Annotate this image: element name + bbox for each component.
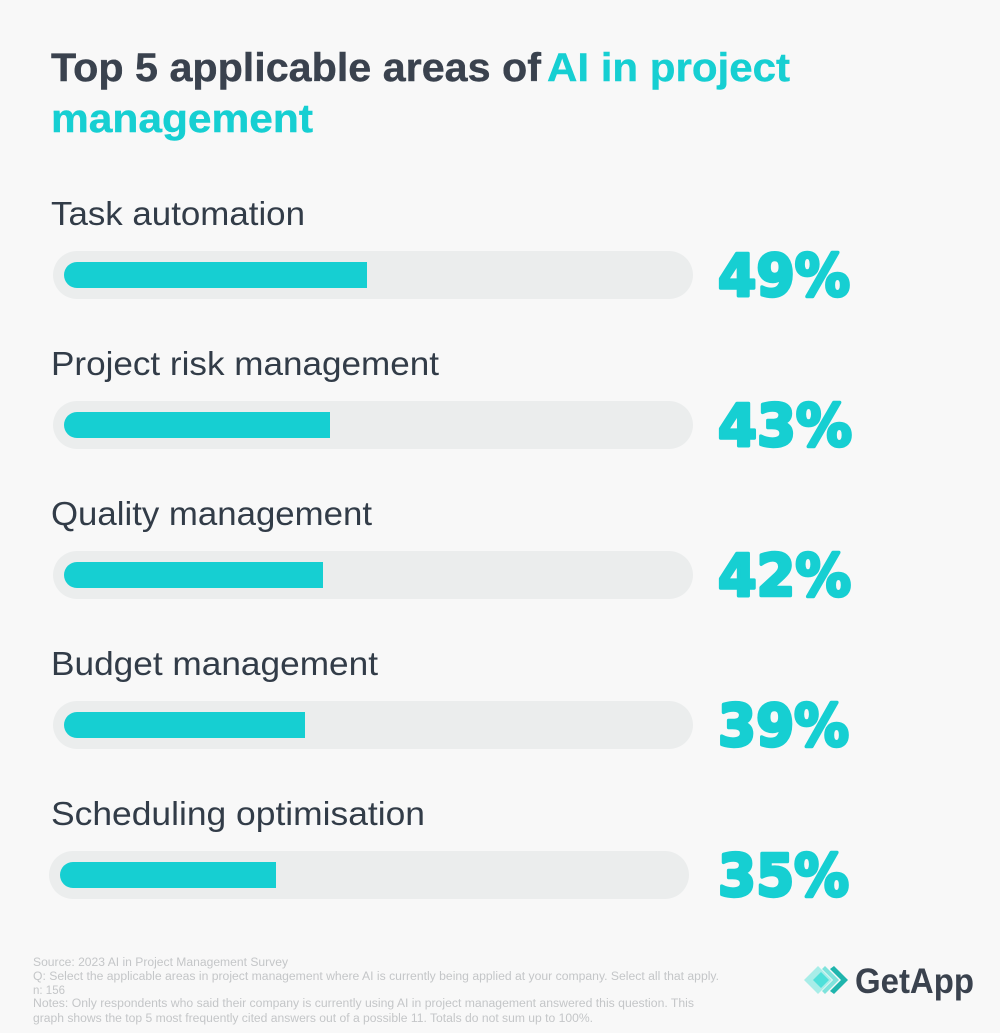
bar track — [53, 701, 693, 749]
bar fill: 49% — [64, 262, 367, 288]
value: 49%: 49% — [718, 242, 850, 310]
GetApp logo — [804, 962, 974, 1001]
source notes: Source: 2023 AI in Project Management Survey — [33, 957, 288, 969]
title: management — [51, 97, 313, 141]
row: Budget management — [51, 645, 849, 760]
row: Scheduling optimisation — [49, 795, 849, 910]
title — [51, 46, 790, 141]
source notes: n: 156 — [33, 985, 65, 997]
source notes: Q: Select the applicable areas in project management where AI is currently being applied at your company. Select all that apply. — [33, 971, 719, 983]
value: 42%: 42% — [718, 542, 851, 610]
row: Project risk management — [51, 345, 852, 460]
icon: GetApp chevrons — [804, 966, 848, 994]
row: Quality management — [51, 495, 851, 610]
bar track — [53, 551, 693, 599]
bar fill: 35% — [60, 862, 276, 888]
bar fill: 39% — [64, 712, 305, 738]
label: Scheduling optimisation: Scheduling optimisation — [51, 795, 425, 832]
source notes: Notes: Only respondents who said their company is currently using AI in project management answered this question. This — [33, 998, 694, 1010]
source notes — [33, 957, 719, 1025]
label: Project risk management: Project risk management — [51, 345, 439, 382]
title: Top 5 applicable areas of — [51, 46, 542, 90]
title: AI in project — [547, 46, 790, 90]
label: Task automation: Task automation — [51, 195, 305, 232]
source notes: graph shows the top 5 most frequently cited answers out of a possible 11. Totals do not sum up to 100%. — [33, 1013, 593, 1025]
bar fill: 42% — [64, 562, 323, 588]
value: 39%: 39% — [718, 692, 849, 760]
label: Quality management: Quality management — [51, 495, 372, 532]
bar fill: 43% — [64, 412, 330, 438]
row: Task automation — [51, 195, 850, 310]
logo wordmark: GetApp — [855, 962, 974, 1001]
value: 35%: 35% — [718, 842, 849, 910]
label: Budget management: Budget management — [51, 645, 378, 682]
bar track — [53, 251, 693, 299]
bar track — [53, 401, 693, 449]
value: 43%: 43% — [718, 392, 852, 460]
bar track — [49, 851, 689, 899]
